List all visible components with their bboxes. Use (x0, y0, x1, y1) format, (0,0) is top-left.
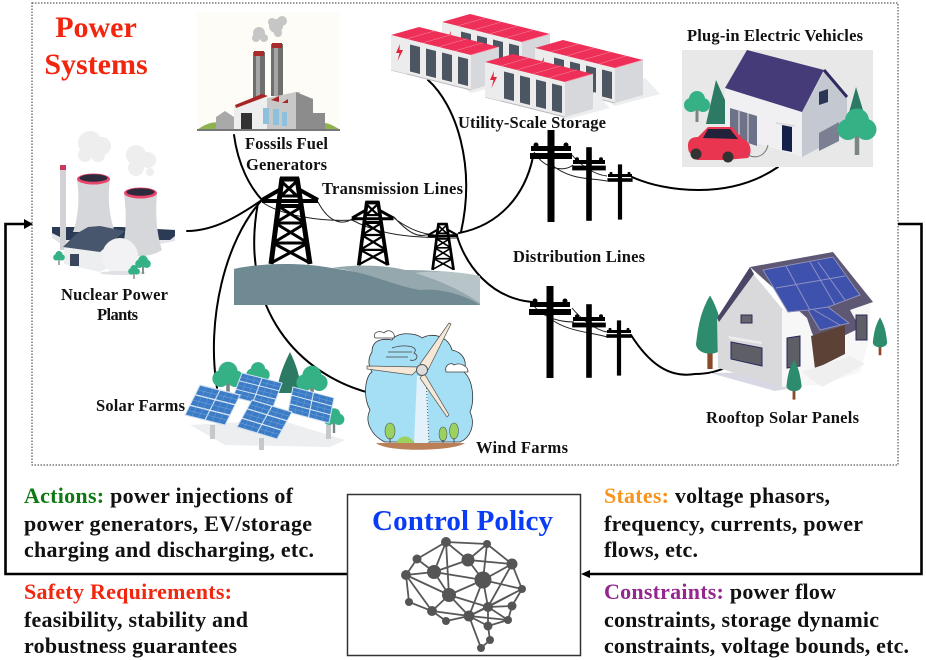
text: safety requirements: Safety Requirements: (24, 579, 232, 604)
icon: house with electric vehicle (682, 50, 876, 167)
text: constraints: constraints, storage dynamic (604, 607, 879, 632)
label: Fossils Fuel Generators: Generators (246, 155, 328, 174)
panel: power systems dashed frame (32, 3, 898, 465)
icon: wind farm (366, 323, 473, 450)
label: Utility-Scale Storage: Utility-Scale Storage (458, 113, 606, 132)
label: Fossils Fuel Generators: Fossils Fuel (245, 134, 328, 153)
label: Nuclear Power Plants: Nuclear Power (61, 285, 168, 304)
tower: small transmission tower (428, 224, 458, 270)
tower: medium transmission tower (352, 202, 394, 265)
label: Rooftop Solar Panels: Rooftop Solar Panels (706, 408, 860, 427)
panel: control policy (348, 494, 580, 656)
heading: Power Systems (44, 11, 148, 81)
icon: neural network brain (401, 537, 526, 652)
tower: large transmission tower (262, 178, 318, 264)
icon: fossil fuel plant (197, 12, 340, 131)
text: actions: power generators, EV/storage (24, 511, 312, 536)
arrow: states feedback to control policy (581, 224, 922, 578)
text: states (604, 483, 863, 562)
hills (234, 264, 480, 305)
icon: solar farm (185, 352, 345, 450)
text: states: States: voltage phasors, (604, 483, 830, 508)
label: Solar Farms: Solar Farms (96, 396, 186, 415)
heading: Control Policy: Control Policy (372, 505, 554, 537)
poles: lower distribution lines (529, 286, 632, 378)
text: safety requirements: feasibility, stability and (24, 607, 248, 632)
icon: nuclear power plant (52, 131, 175, 279)
poles: upper distribution lines (530, 130, 633, 222)
text: actions: charging and discharging, etc. (24, 537, 314, 562)
heading: Power Systems: Systems (44, 48, 148, 81)
connection lines between grid assets (187, 80, 778, 393)
text: constraints (604, 579, 909, 658)
text: actions (24, 483, 314, 562)
arrow: actions feedback to power systems (6, 219, 347, 574)
label: Wind Farms: Wind Farms (476, 438, 569, 457)
label: Plug-in Electric Vehicles: Plug-in Electric Vehicles (687, 26, 864, 45)
label: Nuclear Power Plants: Plants (97, 305, 139, 324)
text: constraints: constraints, voltage bounds, etc. (604, 633, 909, 658)
text: constraints: Constraints: power flow (604, 579, 836, 604)
label: Transmission Lines: Transmission Lines (322, 179, 464, 198)
text: safety requirements: robustness guarantees (24, 633, 237, 658)
icon: house with rooftop solar panels (696, 252, 887, 400)
label: Nuclear Power Plants (61, 285, 168, 324)
label: Distribution Lines: Distribution Lines (513, 247, 646, 266)
label: Fossils Fuel Generators (245, 134, 328, 174)
heading: Power Systems: Power (55, 11, 137, 44)
icon: utility-scale battery storage (391, 14, 660, 120)
text: actions: Actions: power injections of (24, 483, 294, 508)
text: states: frequency, currents, power (604, 511, 863, 536)
text: safety requirements (24, 579, 248, 658)
text: states: flows, etc. (604, 537, 698, 562)
